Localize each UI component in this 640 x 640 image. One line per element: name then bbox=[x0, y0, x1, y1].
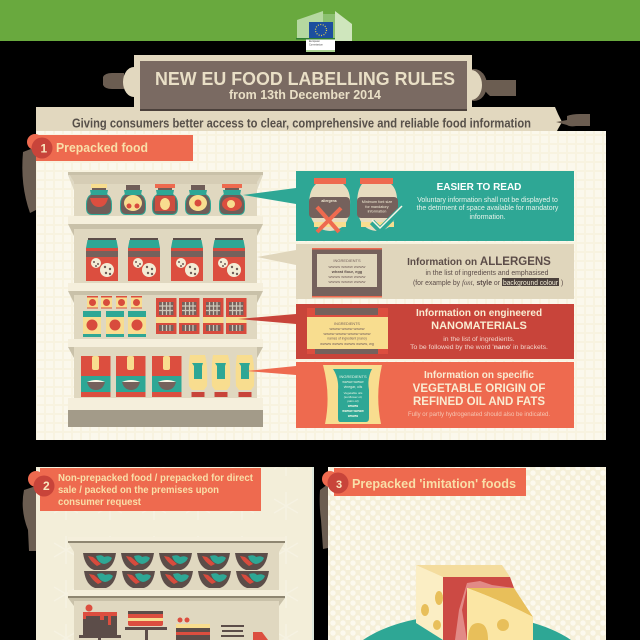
icon: allergen label: wwww wwww wwww bbox=[329, 274, 366, 279]
icon: oil label: (sunflower oil, bbox=[344, 395, 362, 399]
subtitle text: Giving consumers better access to clear, comprehensive and reliable food information bbox=[72, 116, 531, 130]
callout: vegetable oils: VEGETABLE ORIGIN OF bbox=[413, 383, 545, 395]
panel: prepacked food bbox=[22, 131, 606, 440]
heading: imitation foods: 3 bbox=[336, 479, 342, 491]
icon: oil label: wwww wwww bbox=[342, 380, 364, 384]
callout: vegetable oils: REFINED OIL AND FATS bbox=[413, 396, 545, 408]
icon: good jar label: Minimum font size bbox=[362, 200, 392, 204]
callout: vegetable oils bbox=[246, 362, 574, 428]
callout: allergens: (for example by font, style or bbox=[413, 280, 501, 287]
heading: prepacked food bbox=[22, 134, 193, 213]
icon: allergen label: wwww wwww wwww bbox=[329, 279, 366, 284]
icon: oil label: Vegetable oils bbox=[344, 391, 363, 395]
title plaque bbox=[103, 55, 516, 113]
heading: non-prepacked food: 2 bbox=[43, 479, 50, 493]
icon: allergen label bbox=[312, 248, 382, 298]
European Commission logo bbox=[296, 11, 352, 52]
heading: non-prepacked food: sale / packed on the premises upon bbox=[58, 484, 219, 496]
callout: easier to read: the detriment of space available for mandatory bbox=[417, 205, 559, 212]
icon: good jar label: for mandatory bbox=[365, 205, 389, 209]
salad bowls bbox=[83, 553, 269, 588]
European Commission logo: Commission bbox=[309, 44, 323, 46]
icon: oil label: wwww bbox=[347, 404, 359, 408]
callout: nanomaterials bbox=[238, 304, 574, 359]
heading: imitation foods: Prepacked 'imitation' foods bbox=[352, 477, 516, 491]
heading: non-prepacked food: consumer request bbox=[58, 496, 141, 508]
cans and window packs row bbox=[83, 296, 246, 337]
callout: nanomaterials: NANOMATERIALS bbox=[431, 320, 527, 332]
icon: good jar label: information bbox=[368, 210, 386, 214]
panel: non-prepacked food bbox=[23, 467, 314, 640]
icon: oil label: wwww bbox=[347, 414, 359, 418]
icon: oil label: vinegar, oils bbox=[344, 385, 362, 389]
callout: easier to read: Voluntary information shall not be displayed to bbox=[417, 197, 558, 204]
callout: allergens bbox=[257, 244, 574, 299]
oil packs and tubes row bbox=[81, 355, 254, 397]
icon: nano label: wwww wwww wwww wwww, wg bbox=[320, 342, 374, 346]
callout: allergens: in the list of ingredients and emphasised bbox=[426, 270, 549, 277]
callout: allergens: background colour bbox=[503, 280, 559, 287]
heading: prepacked food: 1 bbox=[40, 142, 48, 156]
callout: vegetable oils: Information on specific bbox=[424, 370, 534, 381]
title text: NEW EU FOOD LABELLING RULES bbox=[155, 68, 455, 89]
icon: oil label: palm oil) bbox=[347, 399, 359, 403]
cookie boxes row bbox=[86, 238, 245, 281]
callout: vegetable oils: Fully or partly hydrogenated should also be indicated. bbox=[408, 412, 550, 418]
plate bbox=[363, 614, 571, 640]
date text: from 13th December 2014 bbox=[229, 88, 381, 102]
icon: nano label: names of ingredient (nano) bbox=[327, 336, 367, 340]
shelving unit with bowls bbox=[68, 537, 285, 640]
callout: allergens: Information on ALLERGENS bbox=[407, 256, 551, 268]
callout: easier to read: EASIER TO READ bbox=[437, 182, 521, 193]
shelving unit bbox=[68, 172, 263, 427]
callout: nanomaterials: To be followed by the word 'nano' in brackets. bbox=[410, 344, 548, 351]
jars row bbox=[86, 184, 245, 215]
callout: nanomaterials: Information on engineered bbox=[416, 308, 542, 319]
icon: bad jar label bbox=[309, 178, 350, 232]
icon: good jar label bbox=[357, 178, 402, 231]
icon: nano label: wwww wwww wwww wwww bbox=[323, 332, 371, 336]
callout: nanomaterials: in the list of ingredients. bbox=[443, 336, 515, 343]
icon: oil label: wwww wwww bbox=[341, 409, 364, 413]
icon: allergen label: wwww wwww wwww bbox=[329, 264, 366, 269]
icon: oil label: INGREDIENTS bbox=[339, 374, 367, 379]
callout: allergens: ) bbox=[561, 280, 563, 287]
heading: imitation foods bbox=[320, 468, 526, 549]
icon: nano label: wwww wwww wwww bbox=[329, 327, 365, 331]
callout: easier to read bbox=[243, 171, 574, 241]
green header band bbox=[0, 0, 640, 41]
icon: nano label bbox=[307, 308, 388, 354]
callout: easier to read: information. bbox=[469, 214, 506, 221]
cheese bbox=[416, 565, 533, 640]
cakes and plates bbox=[79, 604, 268, 640]
icon: nano label: INGREDIENTS bbox=[334, 322, 360, 326]
heading: prepacked food: Prepacked food bbox=[56, 140, 148, 155]
European Commission logo: European bbox=[309, 40, 320, 43]
heading: non-prepacked food bbox=[23, 468, 261, 551]
heading: non-prepacked food: Non-prepacked food / prepacked for direct bbox=[58, 472, 253, 484]
panel: imitation foods bbox=[320, 467, 606, 640]
subtitle ribbon bbox=[36, 107, 590, 135]
icon: allergen label: wheat flour, egg bbox=[331, 269, 363, 274]
icon: bad jar label: allergens bbox=[321, 199, 337, 203]
icon: allergen label: INGREDIENTS bbox=[333, 258, 361, 263]
icon: oil label bbox=[323, 365, 382, 424]
